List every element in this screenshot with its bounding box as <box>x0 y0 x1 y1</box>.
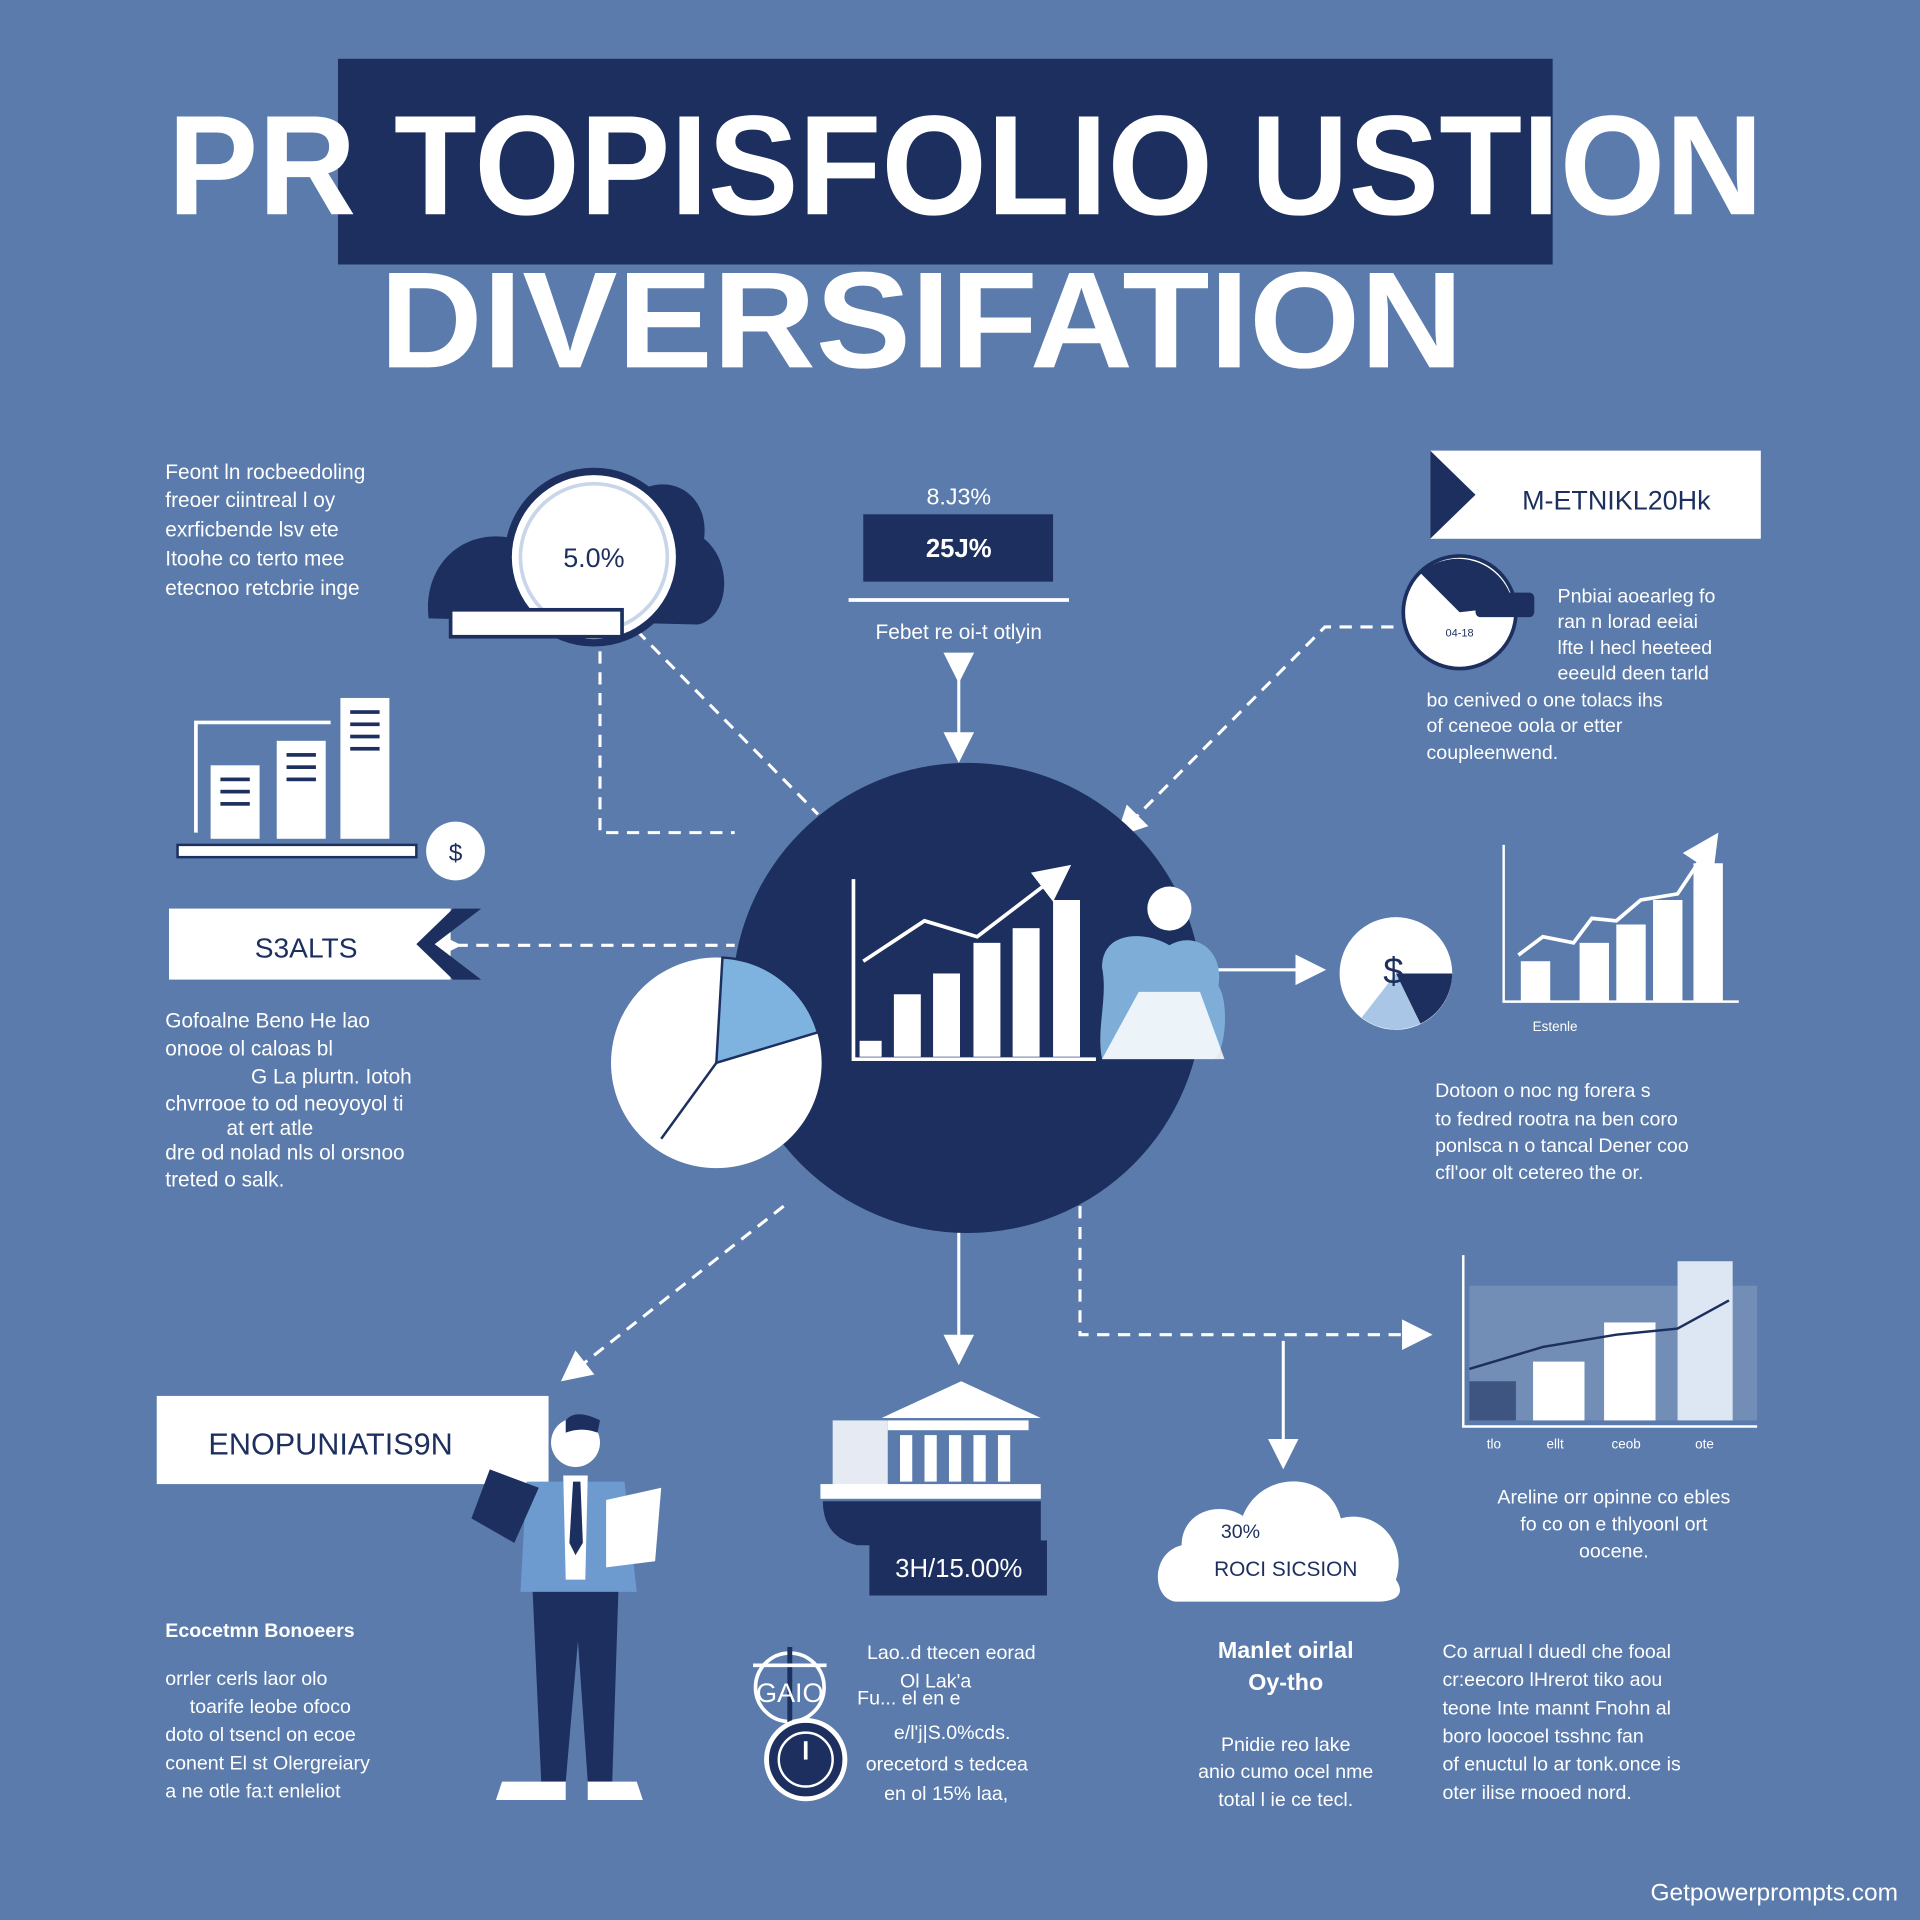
text block: bottom center: e/l'j|S.0%cds. <box>894 1722 1010 1744</box>
text block: top left: freoer ciintreal l oy <box>165 489 336 512</box>
text block: left middle <box>165 1009 412 1192</box>
text block: top left: Feont ln rocbeedoling <box>165 461 365 484</box>
text block: bottom left: Ecocetmn Bonoeers <box>165 1620 355 1642</box>
text block: top right: eeeuld deen tarld <box>1558 663 1709 685</box>
icon: buildings bar chart left: $ <box>449 840 463 867</box>
bar chart right lower: ote <box>1695 1437 1714 1452</box>
S3ALTS banner: S3ALTS <box>255 933 358 964</box>
text block: bottom center right <box>1198 1637 1373 1811</box>
text block: bottom center right: Manlet oirlal <box>1218 1637 1354 1663</box>
text block: top right: bo cenived o one tolacs ihs <box>1427 690 1663 712</box>
top center stat: Febet re oi-t otlyin <box>876 621 1042 644</box>
text block: bottom right: boro loocoel tsshnc fan <box>1442 1725 1644 1747</box>
text block: bottom center: orecetord s tedcea <box>866 1754 1028 1776</box>
text block: bottom center right: anio cumo ocel nme <box>1198 1761 1373 1783</box>
text block: bottom center: Lao..d ttecen eorad <box>867 1642 1036 1664</box>
text block: top right: of ceneoe oola or etter <box>1427 715 1623 737</box>
text block: top left: Itoohe co terto mee <box>165 548 345 571</box>
text block: top right: coupleenwend. <box>1427 742 1558 764</box>
icon: compass and clock <box>753 1647 845 1799</box>
icon: dollar gauge right: $ <box>1383 950 1404 991</box>
watermark: Getpowerprompts.com <box>1650 1879 1898 1906</box>
text block: left middle: Gofoalne Beno He lao <box>165 1009 370 1032</box>
top center stat <box>849 483 1069 644</box>
bar chart right lower: tlo <box>1487 1437 1501 1452</box>
text block: right lower: Areline orr opinne co ebles <box>1497 1487 1731 1509</box>
text block: left middle: onooe ol caloas bl <box>165 1038 333 1061</box>
bar chart <box>853 869 1096 1059</box>
text block: left middle: dre od nolad nls ol orsnoo <box>165 1142 405 1165</box>
text block: top right: lfte I hecl heeteed <box>1558 637 1712 659</box>
icon: cloud with percentage circle: 5.0% <box>563 543 625 573</box>
text block: left middle: G La plurtn. Iotoh <box>251 1066 412 1089</box>
text block: right middle: ponlsca n o tancal Dener coo <box>1435 1135 1689 1157</box>
bar chart right lower <box>1463 1255 1757 1452</box>
text block: right middle: cfl'oor olt cetereo the or. <box>1435 1162 1643 1184</box>
text block: bottom left: toarife leobe ofoco <box>190 1696 351 1718</box>
text block: bottom right: cr:eecoro lHrerot tiko aou <box>1442 1669 1662 1691</box>
ENOPUNIATIS9N banner: ENOPUNIATIS9N <box>208 1428 453 1462</box>
text block: top right <box>1427 585 1715 764</box>
icon: dollar gauge right <box>1340 917 1452 1030</box>
top center stat: 25J% <box>926 535 992 563</box>
text block: right middle: Dotoon o noc ng forera s <box>1435 1080 1651 1102</box>
line chart right: Estenle <box>1533 1019 1578 1034</box>
text block: bottom left: doto ol tsencl on ecoe <box>165 1724 356 1746</box>
text block: left middle: treted o salk. <box>165 1169 284 1192</box>
icon: businessman <box>471 1414 661 1800</box>
icon: compass and clock: GAIO <box>756 1678 823 1708</box>
connector arrows <box>456 627 1427 1378</box>
icon: pie gauge top right <box>1403 556 1534 669</box>
text block: bottom center: en ol 15% laa, <box>884 1783 1008 1805</box>
text block: bottom left <box>165 1620 370 1803</box>
text block: right lower <box>1497 1487 1731 1563</box>
text block: bottom right: teone Inte mannt Fnohn al <box>1442 1697 1671 1719</box>
icon: bank <box>820 1381 1047 1596</box>
icon: bank: 3H/15.00% <box>895 1555 1022 1583</box>
text block: right lower: fo co on e thlyoonl ort <box>1520 1514 1708 1536</box>
top center stat: 8.J3% <box>926 483 991 509</box>
bar chart right lower: ceob <box>1612 1437 1641 1452</box>
text block: bottom right: oter ilise rnooed nord. <box>1442 1782 1632 1804</box>
icon: pie gauge top right: 04-18 <box>1445 628 1474 640</box>
text block: right middle <box>1435 1080 1689 1184</box>
text block: top right: Pnbiai aoearleg fo <box>1558 585 1715 607</box>
text block: bottom center: Ol Lak'a <box>900 1670 971 1692</box>
top right banner: M-ETNIKL20Hk <box>1522 485 1711 515</box>
title banner: PR TOPISFOLIO USTION <box>168 86 1763 245</box>
text block: top left <box>165 461 365 600</box>
text block: bottom center right: total l ie ce tecl. <box>1218 1789 1353 1811</box>
text block: bottom center right: Pnidie reo lake <box>1221 1734 1351 1756</box>
subtitle: DIVERSIFATION <box>380 244 1463 397</box>
icon: cloud with text <box>1158 1481 1400 1602</box>
text block: top left: exrficbende lsv ete <box>165 518 339 541</box>
icon: person <box>1100 887 1225 1059</box>
text block: left middle: chvrrooe to od neoyoyol ti <box>165 1093 403 1116</box>
text block: bottom center <box>857 1642 1036 1805</box>
icon: cloud with percentage circle <box>428 471 724 643</box>
text block: bottom right <box>1442 1641 1681 1804</box>
text block: bottom left: conent El st Olergreiary <box>165 1752 370 1774</box>
icon: buildings bar chart left <box>178 698 485 880</box>
line chart right <box>1504 839 1739 1034</box>
text block: top left: etecnoo retcbrie inge <box>165 577 360 600</box>
text block: left middle: at ert atle <box>227 1117 313 1140</box>
text block: right lower: oocene. <box>1579 1541 1649 1563</box>
bar chart right lower: ellt <box>1547 1437 1564 1452</box>
S3ALTS banner <box>169 909 481 980</box>
icon: cloud with text: ROCI SICSION <box>1214 1558 1357 1581</box>
text block: bottom right: Co arrual l duedl che fooal <box>1442 1641 1671 1663</box>
text block: right middle: to fedred rootra na ben coro <box>1435 1108 1678 1130</box>
ENOPUNIATIS9N banner <box>157 1396 549 1484</box>
text block: bottom center right: Oy-tho <box>1248 1669 1323 1695</box>
icon: cloud with text: 30% <box>1221 1521 1260 1543</box>
text block: top right: ran n lorad eeiai <box>1558 611 1698 633</box>
text block: bottom left: a ne otle fa:t enleliot <box>165 1781 341 1803</box>
central circle <box>611 763 1225 1233</box>
text block: bottom center: Fu... el en e <box>857 1687 961 1709</box>
pie chart <box>611 958 822 1168</box>
top right banner <box>1430 451 1761 539</box>
text block: bottom right: of enuctul lo ar tonk.once is <box>1442 1754 1681 1776</box>
text block: bottom left: orrler cerls laor olo <box>165 1668 328 1690</box>
